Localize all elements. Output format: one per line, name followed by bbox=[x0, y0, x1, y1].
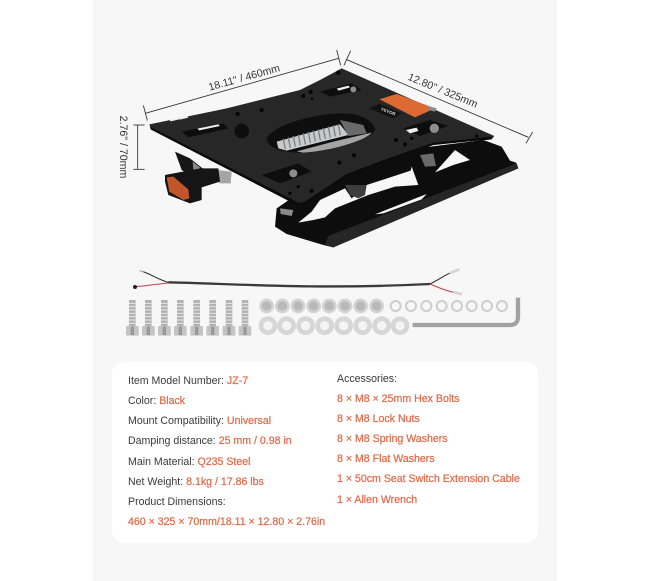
spec: net weight: Net Weight: 8.1kg / 17.86 lbs bbox=[128, 476, 264, 488]
dimension label: depth: 12.80" / 325mm bbox=[406, 71, 479, 111]
hex bolts bbox=[126, 300, 251, 336]
brand label: VEVOR bbox=[380, 106, 397, 117]
dimension label: width: 18.11" / 460mm bbox=[207, 62, 282, 94]
accessories column bbox=[337, 373, 520, 506]
specification card bbox=[112, 362, 538, 543]
rubber stop bbox=[345, 185, 367, 198]
flat washers bbox=[261, 319, 407, 333]
spring washers bbox=[391, 301, 507, 311]
top plate bbox=[149, 68, 494, 205]
accessories heading: Accessories: bbox=[337, 373, 397, 385]
frame body bbox=[275, 140, 518, 247]
adjustment knob bbox=[165, 168, 232, 203]
accessory: lock nuts: 8 × M8 Lock Nuts bbox=[337, 413, 420, 425]
accessory: spring washers: 8 × M8 Spring Washers bbox=[337, 433, 448, 445]
extension cable bbox=[133, 269, 462, 294]
corner bracket bbox=[280, 208, 293, 216]
spec: product dimensions label: Product Dimensions: bbox=[128, 496, 226, 508]
front edge of the frame bbox=[325, 163, 518, 247]
accessory: hex bolts: 8 × M8 × 25mm Hex Bolts bbox=[337, 393, 459, 405]
adjuster bolt bbox=[428, 106, 437, 112]
spec: color: Color: Black bbox=[128, 395, 185, 407]
background panel bbox=[93, 0, 557, 581]
accessory: extension cable: 1 × 50cm Seat Switch Extension Cable bbox=[337, 473, 520, 485]
dimension line: depth bbox=[344, 51, 533, 143]
plate slots bbox=[182, 83, 448, 183]
slot in the frame bbox=[375, 194, 427, 214]
product: seat suspension plate bbox=[133, 50, 533, 205]
dimension line: height bbox=[133, 125, 145, 169]
lock nuts bbox=[261, 300, 383, 312]
dimension label: height: 2.76" / 70mm bbox=[117, 116, 129, 178]
accessory: allen wrench: 1 × Allen Wrench bbox=[337, 494, 417, 506]
pivot bolt bbox=[420, 153, 436, 167]
specs column bbox=[128, 375, 325, 528]
spec: model number: Item Model Number: JZ-7 bbox=[128, 375, 248, 387]
slot hardware bbox=[289, 86, 439, 177]
lower frame of the suspension bbox=[275, 140, 518, 247]
dimension line: width bbox=[143, 50, 341, 121]
accessory: flat washers: 8 × M8 Flat Washers bbox=[337, 453, 435, 465]
rear bracket bolt bbox=[193, 162, 200, 172]
open gap at the right bbox=[435, 150, 470, 172]
spring opening bbox=[267, 113, 375, 153]
brand label bbox=[369, 104, 402, 118]
spec: mount compatibility: Mount Compatibility: Universal bbox=[128, 415, 271, 427]
plate edge bbox=[151, 127, 492, 205]
spec: main material: Main Material: Q235 Steel bbox=[128, 456, 250, 468]
slot highlights bbox=[169, 86, 418, 133]
orange warning label bbox=[379, 94, 435, 117]
plate holes bbox=[236, 70, 478, 195]
spec: damping distance: Damping distance: 25 mm / 0.98 in bbox=[128, 435, 292, 447]
open gap below the plate bbox=[298, 167, 418, 223]
rear bracket bbox=[175, 152, 207, 175]
spec: product dimensions value: 460 × 325 × 70mm/18.11 × 12.80 × 2.76in bbox=[128, 516, 325, 528]
allen wrench bbox=[413, 298, 518, 325]
